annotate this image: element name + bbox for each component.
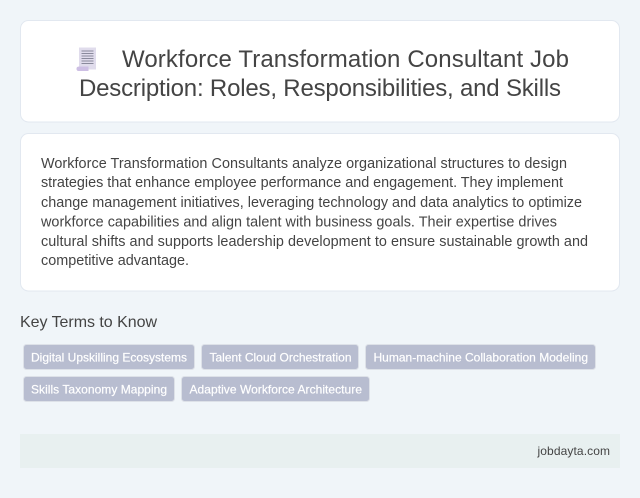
text block: description: competitive advantage. bbox=[41, 253, 189, 269]
icon: scroll document bbox=[76, 48, 96, 71]
tag: talent cloud bbox=[202, 344, 358, 370]
footer bar: jobdayta.com bbox=[536, 444, 610, 458]
heading: title: Description: Roles, Responsibilities, and Skills bbox=[79, 75, 561, 102]
heading: key terms: Key Terms to Know bbox=[20, 314, 157, 331]
tag: human-machine: Human-machine Collaboration Modeling bbox=[374, 350, 588, 364]
tag: skills taxonomy bbox=[24, 376, 174, 402]
tag: adaptive workforce: Adaptive Workforce Architecture bbox=[190, 382, 362, 396]
tag: human-machine bbox=[366, 344, 596, 370]
heading: title: Workforce Transformation Consultant Job bbox=[122, 46, 569, 73]
text block: description: cultural shifts and supports leadership development to ensure sustainable growth and bbox=[41, 234, 588, 250]
text block: description: strategies that enhance employee performance and engagement. They implement bbox=[41, 175, 563, 191]
heading: title bbox=[79, 46, 569, 102]
tag group: key terms bbox=[24, 344, 596, 402]
text block: description: change management initiatives, leveraging technology and data analytics to optimize bbox=[41, 195, 582, 211]
tag: adaptive workforce bbox=[182, 376, 370, 402]
panel: description card bbox=[20, 134, 620, 291]
text block: description bbox=[40, 156, 588, 269]
text block: description: workforce capabilities and align talent with business goals. Their expertise drives bbox=[40, 214, 557, 230]
tag: talent cloud: Talent Cloud Orchestration bbox=[210, 350, 352, 364]
tag: skills taxonomy: Skills Taxonomy Mapping bbox=[31, 382, 167, 396]
panel: title card bbox=[20, 20, 620, 122]
tag: digital upskilling: Digital Upskilling Ecosystems bbox=[31, 350, 187, 364]
tag: digital upskilling bbox=[24, 344, 194, 370]
footer bar bbox=[20, 434, 620, 468]
text block: description: Workforce Transformation Consultants analyze organizational structures to design bbox=[41, 156, 567, 172]
